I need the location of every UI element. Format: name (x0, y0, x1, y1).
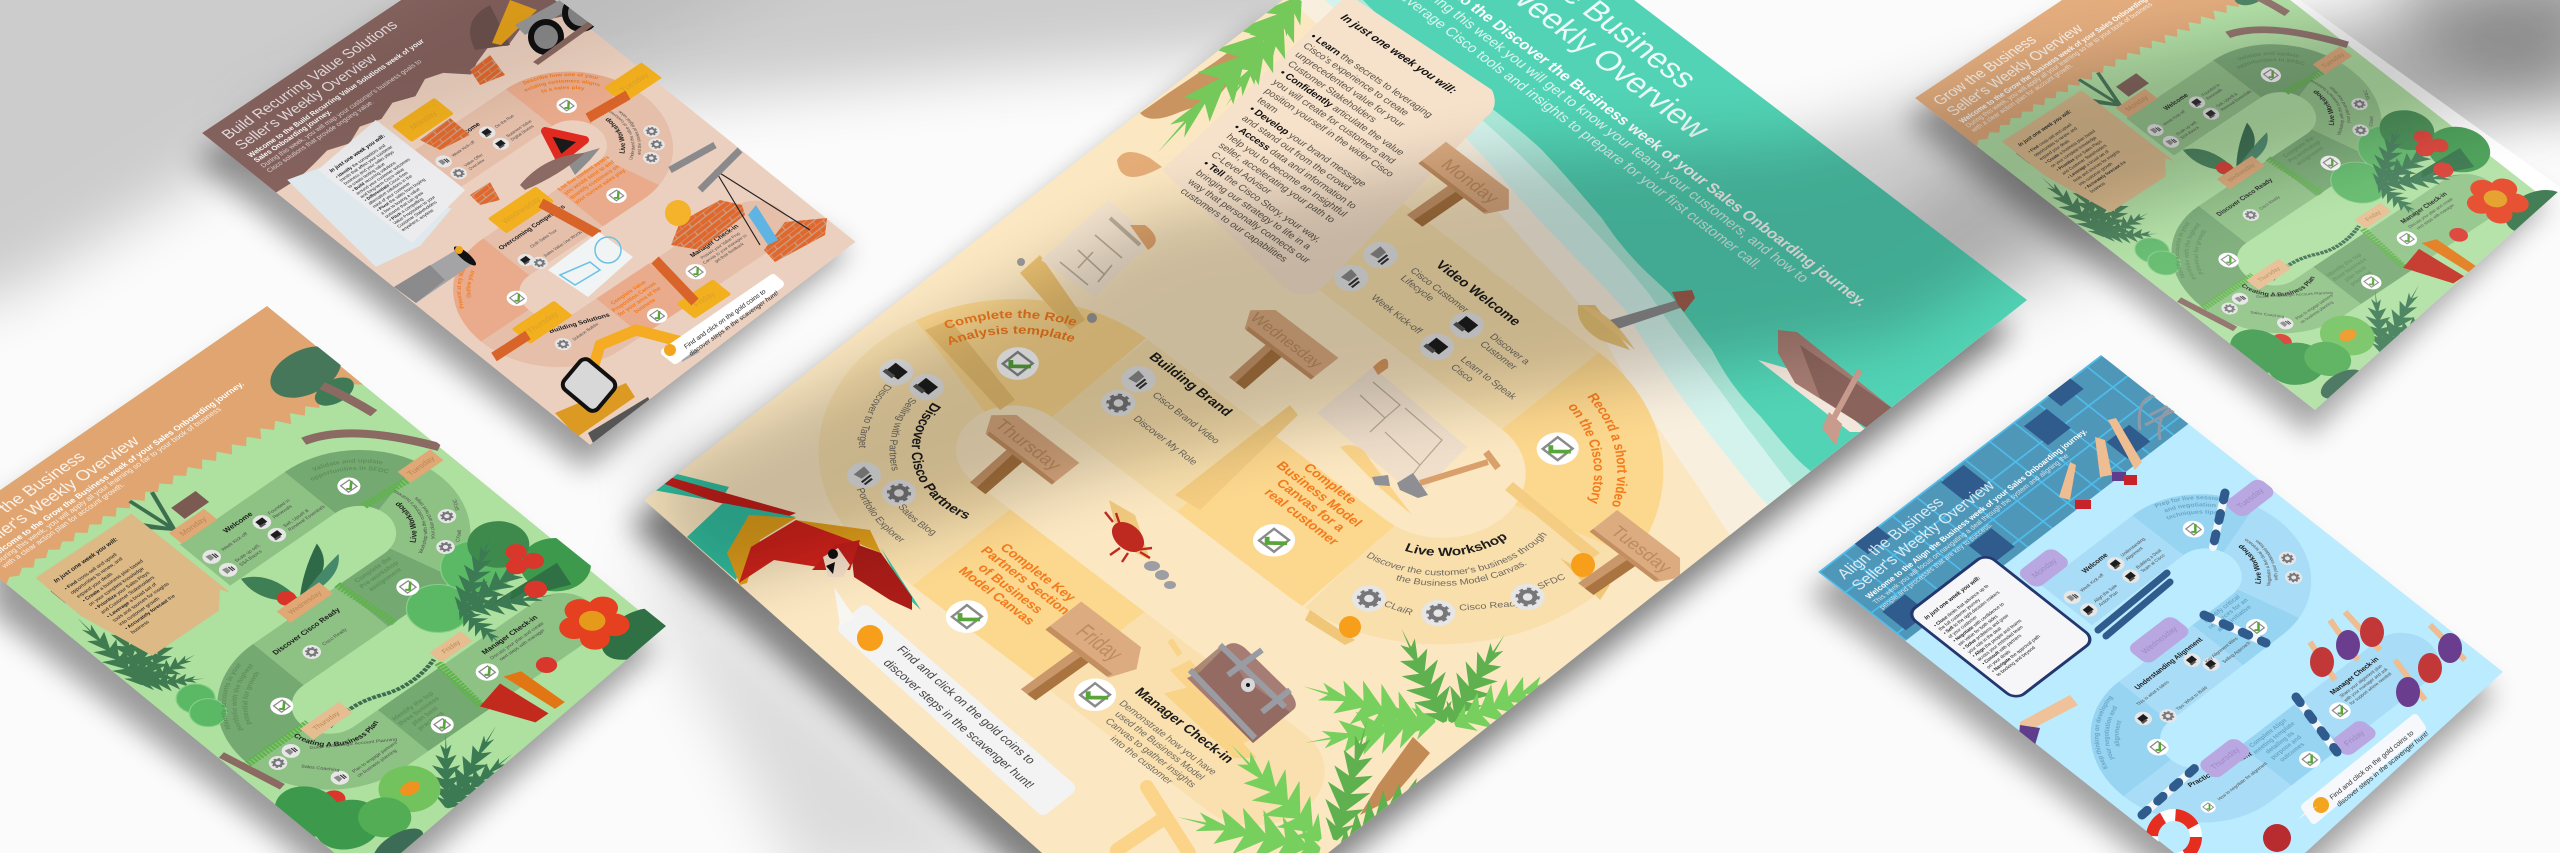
panel: Grow the Business poster (right) (1907, 0, 2560, 419)
lane ropes (2142, 493, 2337, 815)
section text: Build: Solution Builder (571, 321, 600, 341)
swimmers (2018, 418, 2465, 852)
section text: Build: existing customers aligns (524, 80, 600, 92)
scroll text: team (1254, 96, 1281, 115)
section: Record a short video (1514, 386, 1688, 521)
scroll text: help you to become an insightful (1223, 132, 1349, 219)
section: Building Brand: Discover My Role (1130, 414, 1200, 467)
section: Video Welcome: Lifecycle (1398, 274, 1436, 304)
section text: Build: Present at my Manager (456, 270, 465, 308)
scroll text: bringing our strategy to life in a (1193, 168, 1314, 252)
section: Manager Check-in (1056, 660, 1237, 799)
crab (1105, 512, 1152, 562)
callout: gold coins (834, 587, 1068, 808)
scroll text: Customer Stakeholders (1285, 59, 1379, 125)
panel: one week list: of your customer (1947, 615, 1979, 640)
section text: Align: with your extended team (2256, 540, 2278, 580)
day signs: Build: Monday (407, 108, 440, 131)
section text: Align: Action Plan (2097, 590, 2120, 607)
panel: one week list: • Solve problems and grow (1961, 613, 2011, 651)
section text: Align: Alignment (2124, 546, 2144, 561)
section text: Align: How to negotiate for alignment (2216, 761, 2269, 801)
section: Building Brand: Building Brand (1146, 350, 1236, 419)
boat and oar (1758, 330, 1892, 446)
section text: Build: On the Run (493, 113, 516, 129)
hill and palm top-left (1138, 0, 1318, 170)
section text: Build: Complete Value (610, 280, 648, 306)
section text: Align: detailing its (2264, 730, 2297, 755)
panel: one week list: on your deals (1986, 649, 2013, 670)
section: Complete the Role Analysis: Analysis template (939, 282, 1083, 393)
day signs: Build: Friday (691, 289, 718, 309)
section: Manager Check-in: Manager Check-in (1132, 685, 1237, 766)
scroll text: Cisco's experience to create (1300, 41, 1411, 118)
sign: Tuesday: Tuesday (1606, 523, 1677, 577)
section text: Build: Value Offer (463, 152, 485, 167)
poster background: Build (202, 0, 877, 448)
section: Live Workshop: Cisco Ready (1459, 599, 1522, 613)
blueprint and scroll: Build: anywhere, anytime (400, 208, 435, 232)
section: Discover Cisco Partners: Discover to Target (827, 381, 920, 453)
section text: Build (294, 16, 814, 430)
excavator (555, 330, 700, 447)
section text: Align: This is what it takes (2135, 679, 2171, 707)
section text: Align (2020, 480, 2462, 852)
section: Building Brand band (1099, 378, 1225, 474)
scroll text: • Access data and information to (1231, 123, 1359, 211)
pipe (394, 244, 478, 303)
scroll text: and stand out from the crowd (1239, 114, 1353, 193)
section text: Build: Canvas to your manager to (701, 233, 748, 265)
section: Manager Check-in: into the customer (1107, 734, 1176, 787)
blueprint and scroll: Build: Customer Stakeholders (396, 199, 439, 229)
section text: Build: Business Value (505, 119, 533, 138)
sign: Thursday (937, 405, 1079, 515)
section text: Align: Key Alignment Wins (2203, 636, 2240, 664)
blueprint and scroll: Build: to create lasting value (346, 162, 387, 189)
scroll map: business model canvas (1317, 359, 1467, 515)
title: Align: Align the Business (1834, 495, 1948, 582)
section: Building Brand (1089, 348, 1250, 472)
section text: Build: and the stories of digital value (618, 110, 642, 155)
section text: Build: to a sales play (541, 86, 584, 93)
section: Video Welcome: Week Kick-off (1368, 293, 1425, 336)
section: Live Workshop: Live Workshop (1405, 534, 1507, 556)
day signs: Align: Wednesday (2140, 624, 2180, 656)
panel: one week list: • Navigate the approval path (1990, 634, 2042, 674)
day signs: Align: Tuesday (2235, 486, 2267, 510)
blueprint map (548, 232, 633, 297)
scroll text: unprecedented value for your (1292, 50, 1408, 130)
section text: Align: Welcome (2081, 552, 2110, 575)
window shadow overlay (200, 0, 2560, 590)
day signs: Build: Tuesday (617, 70, 652, 94)
pool ladder (2139, 395, 2180, 440)
blueprint and scroll: Build: • Differentiate Cisco from (363, 171, 409, 202)
winding path: Align (1997, 499, 2406, 818)
section text: Build: you would send to and (563, 160, 616, 196)
section: Manager Check-in band (1096, 650, 1256, 772)
title: Build: Seller's Weekly Overview (232, 51, 381, 153)
section: Video Welcome: Discover a (1487, 332, 1532, 367)
section: Record video band (1471, 391, 1653, 531)
section text: Align: align initiative (2216, 604, 2254, 633)
section: Record a short video: Record a short video (1587, 392, 1628, 507)
section text: Build: Outline your (466, 270, 474, 298)
scroll text: • Learn the secrets to leveraging (1307, 32, 1435, 120)
section: Live Workshop: CLaiR (1382, 600, 1415, 618)
life ring (2152, 815, 2196, 853)
section text: Build: quantify customers on (568, 164, 622, 200)
title: Build: Build Recurring Value Solutions (219, 18, 402, 142)
section: Complete Business Model Canvas band (1225, 473, 1348, 566)
title: Build: Welcome to the Build Recurring Value Solutions week of your (245, 37, 426, 159)
callout: Align gold coins: discover steps in the scavenger hunt! (2336, 730, 2430, 809)
section text: Align: Team at Cisco (2139, 553, 2166, 573)
header band: Build (202, 0, 573, 204)
poster background: Align (1818, 355, 2532, 853)
section: Video Welcome band (1353, 240, 1550, 391)
section text: Align: Understanding (2119, 536, 2147, 558)
shovel (1372, 452, 1498, 498)
section text: Build: Present your Value Prop (699, 231, 742, 260)
scroll: one week list (1117, 0, 1495, 295)
section: Record a short video: on the Cisco story (1569, 404, 1604, 504)
section: Live Workshop: the Business Model Canvas. (1390, 518, 1531, 627)
day signs: Align: Monday (2030, 556, 2060, 580)
callout: gold coins: Find and click on the gold coins to (894, 643, 1039, 767)
section text: Align: outcomes (2278, 741, 2307, 763)
section text: Align: alignment (2114, 720, 2122, 746)
section text: Build: for your area of the (617, 286, 663, 317)
title: Align: people and processes that are key to success. (1878, 522, 1994, 611)
parrot (653, 473, 921, 610)
section text: Build: Building Solutions (548, 312, 612, 335)
section text: Align: meeting template (2252, 720, 2297, 755)
day signs: Align: Friday (2342, 728, 2367, 748)
section text: Align: Complete Align (2248, 718, 2289, 749)
section text: Align: Identify critical (2203, 594, 2242, 624)
section: Complete the Role Analysis (928, 265, 1094, 393)
panel: Grow the Business poster (left) (0, 296, 711, 853)
section: Discover Cisco Partners: Sales Blog (892, 501, 941, 539)
panel: one week list: your role in the deal (1966, 626, 2003, 655)
section text: Align: Manager Check-in (2329, 656, 2381, 696)
section text: Build: Digital Stories (509, 124, 535, 142)
section: Live Workshop (1327, 474, 1590, 678)
day signs: Build: Wednesday (499, 194, 544, 225)
header tiles: Align (1808, 347, 2188, 641)
scroll map: role analysis template (1017, 200, 1156, 323)
scroll text: • Confidently articulate the value (1277, 68, 1407, 158)
blueprint and scroll: Build: alternative solutions in the (367, 174, 414, 206)
section text: Build: Sales Value Use Words (542, 230, 583, 258)
day signs: Align: Thursday (2209, 745, 2243, 771)
section text: Align: Building a Deal (2135, 548, 2163, 570)
title: Build: During this week, you will map your customer's business goals to (260, 59, 424, 169)
section text: Build: Understand the value of customers (608, 111, 634, 160)
sign: Monday (1379, 142, 1521, 252)
section: Discover Cisco Partners: Selling with Partners (850, 394, 954, 475)
section: Discover Cisco Partners: Discover Cisco Partners (865, 399, 1029, 525)
sand decals and marked cross (726, 255, 1635, 853)
section text: Build: Manager Check-in (689, 223, 741, 259)
section: Complete Business Model Canvas: real customer (1261, 486, 1342, 548)
title: Build: Cisco solutions that provide ongoing value. (266, 99, 376, 174)
day signs: Build: Thursday (524, 309, 561, 335)
section: Complete Key Partners (916, 535, 1085, 665)
section text: Align: your negotiation and (2104, 706, 2118, 760)
treasure chest (1170, 640, 1296, 755)
section text: Align: with your manager and ask (2342, 667, 2390, 703)
panel: one week list: • Close deals that advance up to (1932, 583, 1991, 628)
blueprint and scroll: Build: business and your sales plays (342, 149, 396, 186)
winding path: Build (368, 76, 759, 363)
blueprint and scroll: Build: Value Proposition to your (392, 195, 437, 225)
sign: Wednesday: Wednesday (1246, 310, 1326, 371)
section: Complete the Role Analysis: Complete the Role (937, 265, 1084, 379)
section text: Align: purpose and (2269, 734, 2304, 761)
section: Complete Business Model Canvas: Business Model (1273, 459, 1366, 529)
sign: Tuesday (1551, 510, 1693, 620)
blueprint and scroll: Build: • Build recurring solutions (351, 160, 398, 192)
callout: Build gold coins: Find and click on the gold coins to (683, 288, 768, 351)
day signs: Build (319, 4, 843, 390)
blueprint and scroll: Build: In just one week you will: (328, 134, 387, 174)
blueprint and scroll: Build: outcome that can grow (383, 190, 425, 219)
section: Complete Key Partners: Model Canvas (955, 564, 1038, 628)
section text: Build: Describe how one of your (522, 74, 599, 85)
blueprint and scroll: Build: trends that affect your customer (338, 144, 394, 182)
section: Discover Cisco Partners band (835, 364, 1073, 548)
palm bottom right (1172, 619, 1568, 853)
section: Manager Check-in: Demonstrate how you have (1116, 699, 1219, 777)
section text: Build: get their feedback (713, 241, 746, 264)
blueprint and scroll: Build: a box to buying a value (379, 187, 422, 215)
warning sign (520, 131, 600, 190)
scroll text: you will create for customers and (1269, 78, 1398, 166)
bulldozer (470, 0, 597, 65)
section: Video Welcome: Video Welcome (1432, 258, 1525, 328)
section text: Align: Align the Sale (2093, 583, 2119, 603)
section text: Align: Week Kick-off (2079, 572, 2105, 593)
section text: Build: your current sales play (573, 168, 628, 205)
section text: Align: Keep thinking on developing (2094, 696, 2114, 770)
panel: one week list: • Align the people and teams (1971, 618, 2024, 659)
section text: Align: Practicing Alignment (2187, 751, 2254, 789)
section text: Build: Live Workshop (606, 118, 626, 154)
sign: Friday (995, 602, 1153, 724)
blueprint and scroll: Build: • Pivot the sales from buying (375, 177, 427, 212)
panel: one week list (1907, 553, 2095, 700)
gold coins (1339, 553, 1595, 638)
section text: Build: Week Kick-off (450, 139, 477, 158)
section: Video Welcome: Cisco Customer (1407, 266, 1471, 315)
section text: Build: Overcoming Competitors (497, 204, 567, 251)
panel: one week list: win value for both sides (1957, 614, 2000, 647)
sea and shoreline (1290, 0, 2040, 560)
section: Live Workshop band (1348, 461, 1578, 639)
section text: Align: Negotiate a live deal scenario (2244, 538, 2272, 586)
section text: Build: Proposition Canvas (611, 281, 658, 313)
scroll text: way that personally connects our (1184, 177, 1313, 266)
scroll text: C-Level Advisor (1208, 150, 1274, 197)
section: Discover Cisco Partners: Portfolio Explorer (840, 484, 920, 545)
panel: one week list: • Sell to the right decision makers (1942, 590, 2002, 636)
blueprint and scroll: Build: mind of your customer (371, 181, 412, 209)
section: Complete Key Partners band (961, 548, 1096, 650)
sword (1578, 290, 1695, 350)
section text: Align: for support where needed (2348, 671, 2393, 706)
scroll text: • Develop your brand message (1246, 105, 1369, 189)
winding path sections (835, 144, 1657, 779)
scroll text: customers to our capabilities (1177, 187, 1290, 264)
section text: Build: Welcome (453, 121, 482, 142)
title: Align: Seller's Weekly Overview (1848, 478, 1999, 594)
section text: Align: Live Workshop (2238, 545, 2261, 584)
day signs: Align (1984, 432, 2483, 820)
section: Video Welcome: Learn to Speak (1458, 355, 1519, 402)
section: Complete Business Model Canvas: Complete (1300, 461, 1360, 507)
section text: Build: List five content assets (557, 155, 611, 192)
section: Complete Key Partners: of Business (975, 561, 1046, 616)
blueprint and scroll: Build: around your customer outcomes (355, 157, 412, 196)
section text: Align: and negotiation (2164, 502, 2216, 512)
section text: Align: Prep for live session (2154, 496, 2220, 508)
poster content in poster coordinates (720, 0, 2020, 853)
blueprint and scroll: Build: • Pitch a compelling (388, 197, 425, 222)
callout: gold coins: discover steps in the scavenger hunt! (880, 657, 1038, 791)
panel: one week list: to booking and beyond (1995, 645, 2037, 678)
section: Video Welcome: Cisco (1448, 363, 1476, 385)
panel: Align the Business poster (1818, 355, 2503, 853)
section: Manager Check-in: Canvas to gather insights (1102, 717, 1198, 790)
section: Manager Check-in: used the Business Model (1112, 710, 1207, 782)
section text: Align: Selling Approach (2221, 640, 2252, 664)
sign: Thursday: Thursday (990, 416, 1067, 474)
section: Video Welcome: Customer (1477, 340, 1520, 372)
panel: one week list: across your extended team (1976, 625, 2025, 662)
title: Align: This week you will focus on navigating a deal through the system and aligning the (1872, 453, 2071, 606)
section text: Build: Overview (467, 158, 486, 171)
section: Complete Key Partners: Complete Key (997, 541, 1080, 604)
scroll text: seller, accelerating your path to (1216, 141, 1338, 225)
sign: Monday: Monday (1437, 156, 1504, 207)
callout: Build gold coins (664, 278, 780, 360)
section: Complete Key Partners: Partners Section (978, 544, 1073, 617)
callout: Align gold coins (2297, 718, 2430, 820)
panel: one week list: In just one week you will: (1923, 576, 1983, 621)
title: Align: Welcome to the Align the Business week of your Sales Onboarding journey. (1864, 427, 2089, 601)
scroll text: In just one week you will: (1338, 12, 1459, 96)
panel: one week list: • Consult with partners (1981, 633, 2024, 666)
callout: Align gold coins: Find and click on the gold coins to (2329, 730, 2415, 802)
rocks (1144, 561, 1176, 589)
blueprint and scroll: Build (287, 120, 465, 267)
title: Build: Sales Onboarding journey. (251, 108, 334, 164)
section text: Align: Tips: What to Build (2175, 685, 2209, 711)
section: Live Workshop: SFDC (1536, 572, 1568, 592)
section text: Align: Understanding Alignment (2134, 636, 2205, 691)
section: Live Workshop: Discover the customer's business through (1362, 474, 1551, 620)
section: Discover Cisco Partners (773, 349, 1045, 560)
sand background (640, 0, 2040, 853)
section: Building Brand: Cisco Brand Video (1149, 391, 1222, 446)
panel: one week list: • Negotiate with confidence to (1952, 602, 2006, 643)
scroll text (1152, 9, 1486, 274)
section: Complete Business Model Canvas: Canvas for a (1273, 476, 1349, 534)
section text: Build: business (633, 298, 658, 315)
section text: Build: Cloth Sales Tour (528, 228, 559, 249)
blueprint and scroll: Build: and long-term Cisco value (359, 167, 406, 199)
section: Role Analysis band (950, 314, 1099, 429)
callout: Build gold coins: discover steps in the scavenger hunt! (688, 290, 780, 358)
section text: Align: techniques tips (2166, 510, 2216, 520)
section: Complete Business Model Canvas (1212, 449, 1378, 577)
sign: Wednesday (1196, 300, 1338, 410)
blueprint and scroll: Build: • Identify the competitors and (334, 143, 387, 179)
panel: one week list: the full customer journey (1937, 597, 1983, 632)
panel: Discover the Business main poster (640, 0, 2040, 853)
sign: Friday: Friday (1070, 620, 1129, 666)
section: Video Welcome (1325, 223, 1571, 412)
panel: Build Recurring Value Solutions poster (202, 0, 856, 445)
section text: Align: resources for an (2207, 597, 2250, 631)
section text: Align: Share your alignment plan (2338, 663, 2384, 698)
brick walls (420, 55, 827, 357)
scroll text: • Tell the Cisco Story, your way, (1200, 159, 1323, 244)
scroll text: position yourself in the wider Cisco (1261, 86, 1396, 180)
